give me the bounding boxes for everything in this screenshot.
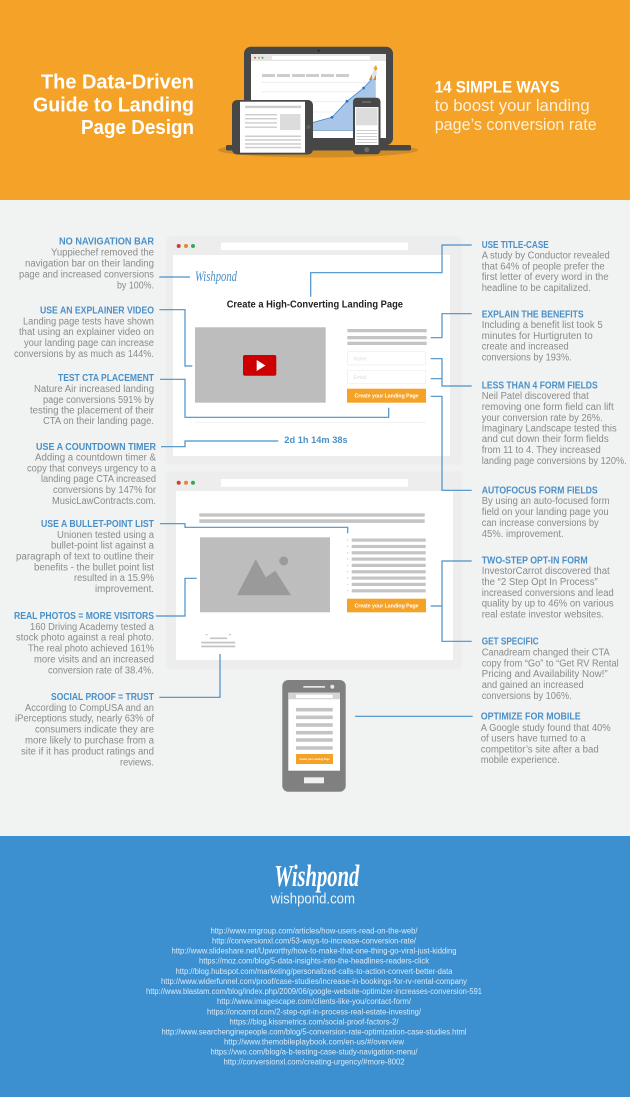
form fields: Email — [354, 375, 366, 381]
panel: landing page mockup 2 — [168, 473, 460, 667]
callout: optimize for mobile: OPTIMIZE FOR MOBILE — [481, 711, 581, 722]
photo placeholder — [200, 537, 330, 612]
callout: social proof: iPerceptions study, nearly 63% of — [15, 714, 154, 724]
source links: http://conversionxl.com/creating-urgency/#more-8002 — [224, 1057, 404, 1066]
callout: explain the benefits: Including a benefit list took 5 — [482, 320, 603, 331]
callout: less than 4 form fields: your conversion rate by 26%. — [482, 413, 603, 424]
callout: social proof: According to CompUSA and an — [25, 703, 154, 714]
heading: page headline: Create a High-Converting Landing Page — [227, 300, 404, 311]
icon: rocket — [369, 65, 378, 80]
callout: less than 4 form fields: from 11 to 4. They increased — [482, 445, 601, 456]
callout: two-step opt-in form: InvestorCarrot discovered that — [482, 566, 610, 577]
subtitle: page’s conversion rate — [435, 115, 597, 134]
source links: https://blog.kissmetrics.com/social-proof-factors-2/ — [230, 1017, 399, 1026]
source links: http://www.imagescape.com/clients-like-you/contact-form/ — [217, 997, 412, 1006]
callout: bullet-point list: benefits - the bullet point list — [34, 562, 154, 574]
form fields: Name — [354, 356, 367, 362]
callout: explain the benefits: minutes for Hurtigruten to — [482, 331, 593, 342]
callout: optimize for mobile: mobile experience. — [481, 755, 560, 766]
callout: real photos — [14, 611, 155, 676]
callout: real photos: more visits and an increased — [34, 654, 154, 666]
icon: devices illustration — [218, 47, 418, 158]
callout: bullet-point list: Unionen tested using a — [57, 530, 155, 541]
source links — [146, 927, 482, 1066]
source links: http://www.nngroup.com/articles/how-users-read-on-the-web/ — [210, 927, 418, 936]
callout: get specific: copy from “Go” to “Get RV Rental — [482, 658, 619, 670]
callout: less than 4 form fields: LESS THAN 4 FORM FIELDS — [482, 380, 598, 391]
countdown timer: 2d 1h 14m 38s — [284, 435, 348, 446]
callout: get specific — [482, 637, 619, 702]
logo: Wishpond: Wishpond — [195, 269, 237, 285]
callout: two-step opt-in form — [482, 555, 614, 620]
callout: two-step opt-in form: increased conversions and lead — [482, 588, 614, 599]
callout: bullet-point list — [16, 519, 155, 595]
callout: less than 4 form fields: removing one form field can lift — [482, 402, 614, 413]
benefit bars — [347, 329, 427, 345]
callout: real photos: conversion rate of 38.4%. — [48, 666, 154, 676]
callout: title-case: that 64% of people prefer the — [482, 262, 605, 272]
callout: social proof: more likely to purchase from a — [25, 736, 155, 746]
callout: get specific: Pricing and Availability Now!” — [482, 669, 608, 680]
callout: bullet-point list: paragraph of text to outline their — [16, 552, 155, 562]
callout: explainer video: that using an explainer video on — [19, 327, 154, 338]
callout: explainer video — [14, 306, 155, 360]
callout: less than 4 form fields: Imaginary Landscape tested this — [482, 424, 617, 434]
callout: get specific: GET SPECIFIC — [482, 637, 539, 648]
callout: no navigation bar — [19, 236, 155, 292]
callout: explain the benefits — [482, 309, 603, 364]
callout: get specific: Canadream changed their CTA — [482, 648, 610, 658]
subtitle: to boost your landing — [435, 96, 590, 115]
callout: explain the benefits: EXPLAIN THE BENEFITS — [482, 309, 584, 320]
callout: bullet-point list: resulted in a 15.9% — [74, 573, 154, 584]
callout: two-step opt-in form: the “2 Step Opt In Process” — [482, 577, 598, 588]
callout: autofocus form fields: field on your landing page you — [482, 507, 609, 518]
source links: http://conversionxl.com/53-ways-to-increase-conversion-rate/ — [212, 937, 417, 946]
callout: social proof: reviews. — [120, 758, 154, 768]
title — [33, 71, 194, 139]
CTA button — [347, 599, 426, 612]
phone mockup — [282, 680, 346, 792]
callout: optimize for mobile: of users have turned to a — [481, 734, 586, 744]
callout: no navigation bar: page and increased conversions — [19, 270, 154, 281]
footer band — [0, 836, 630, 1097]
callout: optimize for mobile — [481, 711, 611, 766]
callout: get specific: conversions by 106%. — [482, 691, 572, 702]
callout: no navigation bar: NO NAVIGATION BAR — [59, 236, 154, 248]
callout: title-case: A study by Conductor revealed — [482, 250, 610, 262]
callout: autofocus form fields: AUTOFOCUS FORM FIELDS — [482, 486, 598, 497]
testimonial bars — [201, 634, 235, 647]
callout: no navigation bar: Yuppiechef removed the — [51, 248, 155, 258]
form fields — [348, 352, 426, 384]
callout: autofocus form fields: can increase conversions by — [482, 518, 599, 529]
CTA button — [347, 389, 426, 403]
callout: real photos: 160 Driving Academy tested a — [30, 622, 155, 633]
callout: less than 4 form fields: and cut down their form fields — [482, 434, 609, 445]
bullet list — [347, 538, 426, 592]
subtitle: 14 SIMPLE WAYS — [435, 77, 560, 96]
callout: countdown timer: USE A COUNTDOWN TIMER — [36, 442, 156, 453]
CTA button: Create your Landing Page — [354, 604, 419, 610]
callout: countdown timer — [27, 442, 157, 507]
callout: autofocus form fields: 45%. improvement. — [482, 529, 564, 540]
callout: two-step opt-in form: TWO-STEP OPT-IN FORM — [482, 555, 588, 566]
callout: test CTA placement: page conversions 591% by — [43, 395, 154, 406]
source links: https://vwo.com/blog/a-b-testing-case-study-navigation-menu/ — [210, 1047, 418, 1056]
callout: explainer video: your landing page can increase — [24, 338, 155, 349]
callout: optimize for mobile: A Google study found that 40% — [481, 723, 611, 734]
website: wishpond.com — [270, 892, 355, 908]
callout: real photos: stock photo against a real photo. — [16, 632, 154, 644]
callout: bullet-point list: USE A BULLET-POINT LIST — [41, 519, 154, 530]
callout: real photos: REAL PHOTOS = MORE VISITORS — [14, 611, 154, 622]
callout: optimize for mobile: competitor’s site after a bad — [481, 744, 599, 756]
callout: bullet-point list: bullet-point list against a — [51, 540, 155, 552]
callout: less than 4 form fields: Neil Patel discovered that — [482, 391, 589, 402]
callout: two-step opt-in form: quality by up to 46% on various — [482, 598, 614, 610]
callout: test CTA placement: TEST CTA PLACEMENT — [58, 373, 154, 384]
callout: test CTA placement — [30, 373, 155, 427]
callout: test CTA placement: testing the placement of their — [30, 405, 155, 416]
callout: title-case: headline to be capitalized. — [482, 283, 591, 294]
callout: title-case — [482, 240, 610, 294]
source links: http://www.themobileplaybook.com/en-us/#/overview — [224, 1037, 404, 1046]
callout: explain the benefits: create and increased — [482, 342, 569, 352]
callout: title-case: first letter of every word in the — [482, 272, 609, 283]
callout: social proof: SOCIAL PROOF = TRUST — [51, 692, 154, 703]
callout: countdown timer: conversions by 147% for — [53, 485, 157, 496]
callout: countdown timer: MusicLawContracts.com. — [52, 496, 156, 507]
subtitle — [435, 77, 597, 134]
callout: get specific: and gained an increased — [482, 680, 584, 691]
source links: http://www.slideshare.net/Upworthy/how-to-make-that-one-thing-go-viral-just-kidding — [172, 947, 456, 956]
callout: no navigation bar: by 100%. — [117, 281, 154, 292]
callout: explain the benefits: conversions by 193%. — [482, 352, 572, 364]
callout: test CTA placement: CTA on their landing page. — [43, 416, 154, 427]
source links: http://www.blastam.com/blog/index.php/2009/06/google-website-optimizer-increases-conversion-591 — [146, 987, 482, 996]
source links: https://oncarrot.com/2-step-opt-in-process-real-estate-investing/ — [207, 1007, 422, 1016]
video placeholder — [195, 327, 326, 403]
source links: https://moz.com/blog/5-data-insights-into-the-headlines-readers-click — [199, 957, 429, 966]
callout: autofocus form fields: By using an auto-focused form — [482, 496, 610, 507]
callout: less than 4 form fields — [482, 380, 627, 467]
phone mockup: Create your Landing Page — [300, 757, 330, 761]
callout: social proof: consumers indicate they are — [35, 724, 155, 736]
callout: countdown timer: landing page CTA increased — [41, 474, 156, 485]
callout: explainer video: Landing page tests have shown — [23, 316, 154, 327]
title: Guide to Landing — [33, 93, 194, 116]
callout: social proof — [15, 692, 155, 768]
panel: landing page mockup 1 — [168, 238, 460, 463]
headline bars — [199, 513, 425, 523]
source links: http://www.widerfunnel.com/proof/case-studies/increase-in-bookings-for-rv-rental-company — [161, 977, 467, 986]
callout: bullet-point list: improvement. — [95, 584, 154, 595]
callout: test CTA placement: Nature Air increased landing — [34, 384, 154, 395]
callout: two-step opt-in form: real estate investor websites. — [482, 610, 604, 620]
header band — [0, 0, 630, 200]
callout: explainer video: conversions by as much as 144%. — [14, 349, 154, 360]
callout: no navigation bar: navigation bar on their landing — [25, 258, 154, 270]
title: Page Design — [81, 116, 194, 139]
connector lines — [156, 245, 473, 716]
callout: countdown timer: copy that conveys urgency to a — [27, 464, 157, 474]
title: The Data-Driven — [41, 71, 194, 94]
callout: social proof: site if it has product ratings and — [21, 746, 154, 758]
source links: http://www.searchenginepeople.com/blog/5-conversion-rate-optimization-case-studies.html — [162, 1027, 467, 1036]
callout: explainer video: USE AN EXPLAINER VIDEO — [40, 306, 154, 316]
CTA button: Create your Landing Page — [354, 394, 419, 400]
callout: title-case: USE TITLE-CASE — [482, 240, 549, 251]
callout: autofocus form fields — [482, 486, 610, 540]
callout: real photos: The real photo achieved 161% — [28, 644, 154, 654]
callout: countdown timer: Adding a countdown timer & — [35, 452, 156, 464]
logo: Wishpond: Wishpond — [274, 858, 360, 893]
source links: http://blog.hubspot.com/marketing/personalized-calls-to-action-convert-better-data — [176, 967, 453, 976]
